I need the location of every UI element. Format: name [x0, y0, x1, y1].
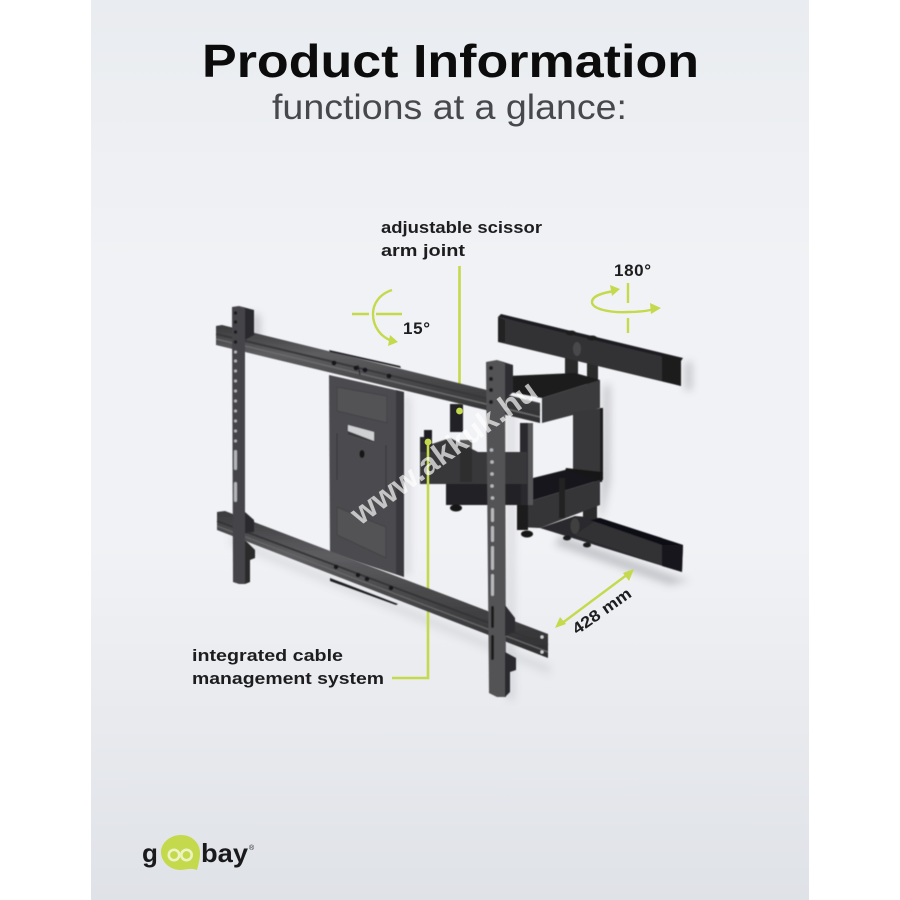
- arrow: 428 mm depth: [555, 569, 634, 628]
- wall mount arm assembly: [420, 314, 683, 572]
- label: 428 mm: 428 mm: [570, 585, 635, 638]
- upper wall bar: [498, 314, 683, 386]
- vertical link plate: [573, 408, 603, 478]
- icon: 180 degree swivel: [592, 283, 661, 333]
- green dots: [425, 408, 463, 445]
- icon: 15 degree tilt: [352, 290, 402, 346]
- logo: goobay: [142, 835, 255, 870]
- logo: goobay: ®: [249, 844, 255, 852]
- label: adjustable scissor arm joint: arm joint: [381, 241, 465, 260]
- background panel: [91, 0, 809, 900]
- upper rail: [216, 325, 540, 423]
- logo: goobay: bay: [201, 838, 249, 868]
- right vertical bracket: [486, 360, 516, 697]
- label: 180 degrees: 180°: [614, 261, 651, 280]
- watermark: www.akkuk.hu: [343, 373, 544, 532]
- arm posts: [450, 404, 463, 432]
- left vertical bracket: [232, 306, 255, 584]
- lower rail: [217, 511, 548, 658]
- green leader: scissor arm joint: [458, 266, 461, 411]
- logo: goobay: g: [142, 838, 158, 868]
- upper arm block: [508, 373, 600, 423]
- green leader: cable management: [392, 442, 428, 678]
- label: integrated cable management system: [192, 646, 384, 688]
- title: Product Information: [202, 35, 699, 87]
- label: adjustable scissor arm joint: [381, 218, 542, 260]
- lower arm block: [517, 470, 600, 538]
- subtitle: functions at a glance:: [272, 88, 627, 127]
- middle scissor arm: [420, 430, 527, 512]
- center mounting plate: [329, 375, 404, 577]
- label: integrated cable management system: management system: [192, 669, 384, 688]
- elbow bolts: [562, 468, 603, 482]
- label: integrated cable management system: integrated cable: [192, 646, 343, 665]
- label: 15 degrees: 15°: [403, 319, 430, 338]
- shadows: [230, 312, 692, 700]
- label: adjustable scissor arm joint: adjustable scissor: [381, 218, 542, 237]
- lower wall bar: [540, 506, 683, 572]
